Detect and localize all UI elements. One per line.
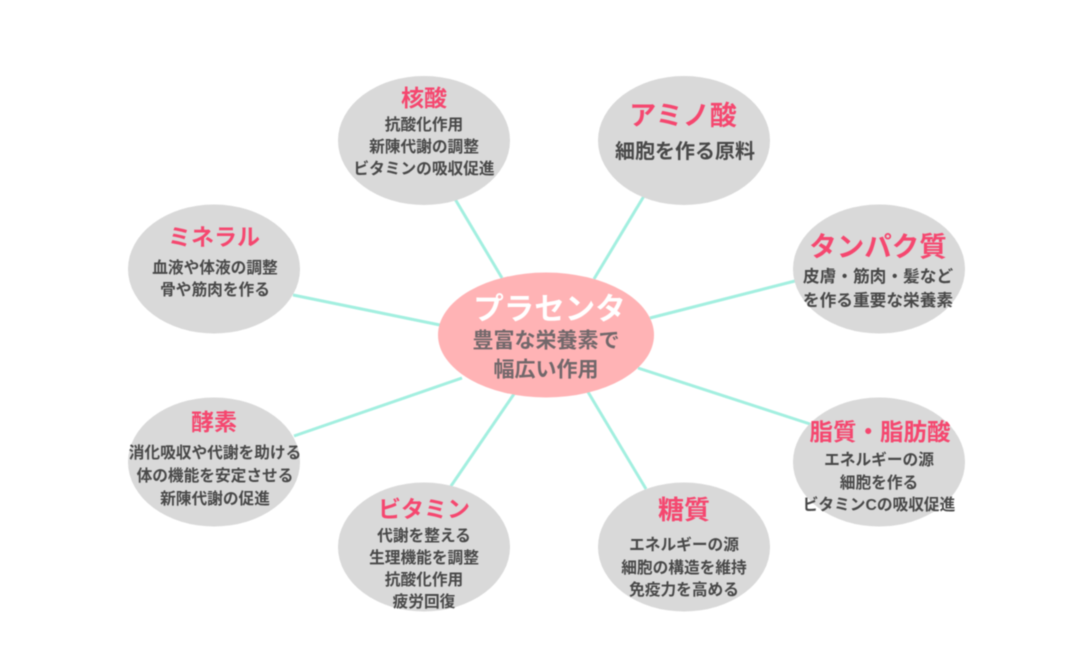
text: ビタミン effects: 疲労回復 xyxy=(393,592,456,611)
text: 糖質 effects: 細胞の構造を維持 xyxy=(621,558,747,577)
text: ビタミン effects: 生理機能を調整 xyxy=(369,548,479,567)
text: ミネラル effects: 骨や筋肉を作る xyxy=(160,280,270,299)
panel: アミノ酸 xyxy=(598,76,770,205)
text: タンパク質 effects: を作る重要な栄養素 xyxy=(803,290,953,310)
text: アミノ酸 effects: 細胞を作る原料 xyxy=(615,140,755,163)
text: 酵素 effects: 体の機能を安定させる xyxy=(137,466,293,485)
heading: タンパク質: タンパク質 xyxy=(809,231,947,262)
panel: 酵素 xyxy=(128,398,301,526)
text: 脂質・脂肪酸 effects: エネルギーの源 xyxy=(824,452,934,469)
connector lines xyxy=(293,196,810,489)
heading: アミノ酸: アミノ酸 xyxy=(629,101,737,131)
text: 糖質 effects: エネルギーの源 xyxy=(629,537,739,554)
heading: 核酸: 核酸 xyxy=(401,85,447,111)
text: ビタミン effects: 代謝を整える xyxy=(377,528,471,545)
panel: center プラセンタ xyxy=(438,272,654,398)
heading: ミネラル: ミネラル xyxy=(168,224,260,250)
panel: ミネラル xyxy=(128,204,300,334)
heading: 糖質: 糖質 xyxy=(658,495,710,525)
panel: 脂質・脂肪酸 xyxy=(793,398,965,526)
text: 核酸 effects: 抗酸化作用 xyxy=(385,117,463,134)
panel: 糖質 xyxy=(598,482,770,612)
text: ビタミン effects: 抗酸化作用 xyxy=(385,570,463,589)
text: center description: 幅広い作用 xyxy=(494,358,598,382)
text: ミネラル effects: 血液や体液の調整 xyxy=(152,260,278,277)
text: 核酸 effects: 新陳代謝の調整 xyxy=(369,137,479,156)
text: 糖質 effects: 免疫力を高める xyxy=(629,580,739,599)
heading: 脂質・脂肪酸: 脂質・脂肪酸 xyxy=(810,419,951,445)
text: center description: 豊富な栄養素で xyxy=(472,330,620,352)
text: タンパク質 effects: 皮膚・筋肉・髪など xyxy=(803,267,953,286)
panel: ビタミン xyxy=(338,482,510,612)
text: 酵素 effects: 消化吸収や代謝を助ける xyxy=(129,445,301,462)
text: 脂質・脂肪酸 effects: 細胞を作る xyxy=(840,474,918,492)
heading: ビタミン: ビタミン xyxy=(378,496,470,522)
heading: プラセンタ: プラセンタ xyxy=(473,292,626,326)
panel: 核酸 xyxy=(338,76,510,205)
text: 脂質・脂肪酸 effects: ビタミンCの吸収促進 xyxy=(803,495,956,514)
panel: タンパク質 xyxy=(793,204,965,334)
text: 酵素 effects: 新陳代謝の促進 xyxy=(160,489,270,508)
text: 核酸 effects: ビタミンの吸収促進 xyxy=(353,159,495,178)
heading: 酵素: 酵素 xyxy=(191,409,237,435)
